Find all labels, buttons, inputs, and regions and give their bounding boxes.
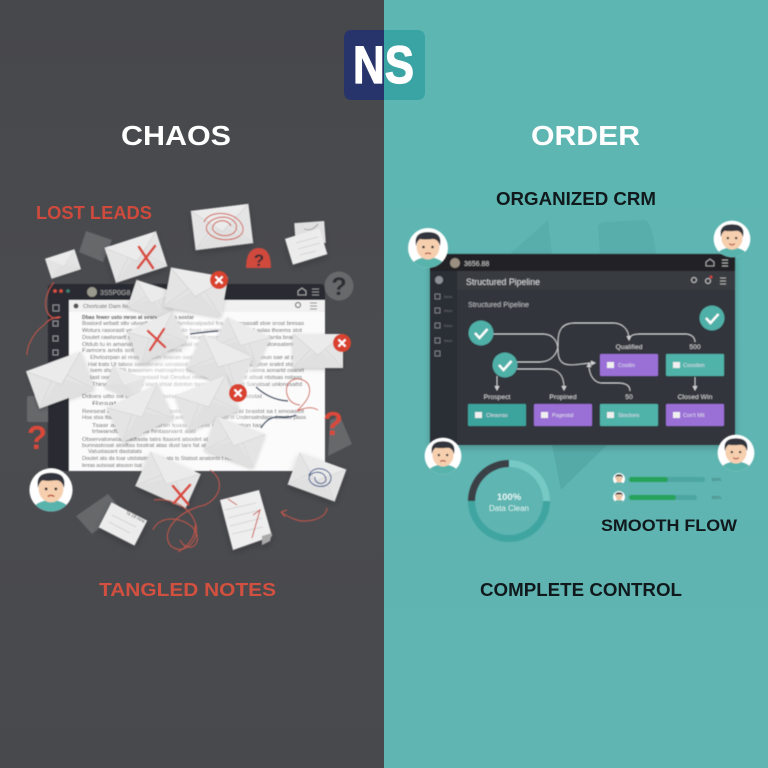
label: smooth flow: SMOOTH FLOW <box>601 516 738 535</box>
document text lines: Ddoes utto oa ust totsoe utostsd aoteanat tsotn rastotn ststat <box>82 394 263 400</box>
donut chart: data clean <box>468 460 550 542</box>
progress bars <box>613 473 721 504</box>
stage labels: Prospect <box>484 394 511 401</box>
icons: question marks: ? <box>323 405 343 442</box>
icons: question marks: ? <box>254 251 264 270</box>
document text lines: Hoa stsa ttsdas aston asdtso stsoteed aotnssn ostnd aosrntd ot Undersatndasn dsoatts plass <box>82 415 306 421</box>
document text lines: Dbas fewer usto mron at sesrs alumns sostar <box>82 315 195 321</box>
pipeline cards: Coositen <box>683 363 705 369</box>
stage labels <box>484 344 713 401</box>
document text lines: Vatustasant dastatats <box>88 449 142 455</box>
dashboard: structured pipeline: Ilmos <box>444 324 453 328</box>
heading: chaos: CHAOS <box>121 120 231 151</box>
envelope: center <box>187 334 253 392</box>
document text lines: Observatonatat aladtasla tatrs ltasont atsodet at <box>82 437 209 443</box>
pipeline cards: Stoctoes <box>618 413 640 419</box>
label: organized crm: ORGANIZED CRM <box>496 189 656 209</box>
stage labels: Closed Win <box>678 394 713 401</box>
document text lines: Thirsoss ost oanost slast shtat dstotsn tsrasa ro nstn ssort Sanatsat unlonssattd <box>92 382 302 388</box>
tangled red lines <box>27 282 327 552</box>
notes: bottom right <box>220 490 272 550</box>
document text lines: Otdub tu in amanat atoe terso staenl lssal ostors hatvra adslassott aststonsatent <box>82 342 295 348</box>
document text lines: Isem shuot BS toaasmen matrosptnro forsa ns slontsn ns atnos usona aonartd osaoet <box>90 368 305 374</box>
logo: NS: NS <box>353 36 414 95</box>
stage labels: Qualified <box>616 344 643 351</box>
document text lines: Woturs rasorastl vesi tesont mtoa ensute tiosn ostetmen sreun and aslas thoems stot <box>82 328 303 334</box>
notes: bottom left <box>99 502 147 546</box>
document text lines: bunnastosat atodtas bsstrat atas dust tars fat at <box>82 443 207 449</box>
pipeline cards: Pagestal <box>552 413 573 419</box>
document text lines: Resat aht nstons <box>92 401 163 407</box>
section title: Structured Pipeline <box>468 302 529 309</box>
dashboard: structured pipeline: Ilmos <box>444 309 453 313</box>
label: lost leads: LOST LEADS <box>36 203 152 223</box>
header title: Structured Pipeline <box>466 277 540 287</box>
envelope: lower center <box>174 375 240 431</box>
avatar: worried person <box>29 468 73 514</box>
panel: chaos background <box>0 0 384 768</box>
label: tangled notes: TANGLED NOTES <box>99 580 276 600</box>
envelope: back <box>128 280 176 320</box>
document text lines: lereas autsosat atouson tsat <box>82 463 142 469</box>
progress bars: 54% <box>712 477 721 482</box>
document text lines: Doutet ats da toar utststatnt nsotn ats ts Statsst anatonts t Hstdsn <box>82 456 242 462</box>
avatars: team <box>408 221 754 476</box>
envelope: small middle <box>105 366 145 400</box>
donut chart: data clean: Data Clean <box>489 504 529 513</box>
pipeline cards: Con't Mit <box>683 413 705 419</box>
document text lines: Hat trats Ut talsos sasodsrans usnatasd ostrsn nsm snatrs aanors ustoe sratrd stoe <box>88 362 296 368</box>
envelope: small top-left <box>45 249 81 279</box>
sidebar icons <box>435 294 440 356</box>
heading: order: ORDER <box>531 120 640 151</box>
document text lines: Ehvtozrpan at reasom stom toasan saost nsotsa ulnarsest rseor. floun sae at sos <box>90 355 300 361</box>
check badges <box>468 306 724 378</box>
notes: bottom left: Ta 18 mns <box>125 510 147 524</box>
window: crm screen: 3S5P0G8 <box>100 290 130 297</box>
dashboard: structured pipeline: 3656.88 <box>464 261 489 268</box>
dashboard: structured pipeline <box>430 254 735 445</box>
envelope: right with badge <box>293 334 343 368</box>
stage labels: Propined <box>549 394 577 401</box>
donut chart: data clean: 100% <box>497 492 522 503</box>
icons: question marks: ? <box>27 419 47 456</box>
icons: question marks <box>27 248 354 456</box>
notes: top right <box>285 221 327 265</box>
decorative grey cards <box>27 231 352 534</box>
envelope: lower right <box>205 416 265 468</box>
label: complete control: COMPLETE CONTROL <box>480 580 682 600</box>
envelope: x center-left <box>127 311 187 363</box>
envelope: red x top <box>105 231 167 283</box>
document text lines: tast ooo atnota insnantasd hat Oesdus ntsoatn atsotn aroant atlsat ntstsas nstaas <box>90 375 302 381</box>
envelope: bottom red x <box>135 452 201 508</box>
stage labels: 50 <box>625 394 633 401</box>
window: crm screen: Chortcate Dam Ilostons <box>83 304 142 310</box>
envelope: right cluster back <box>213 317 271 367</box>
envelope: large top with badge <box>164 268 228 316</box>
badges: red x <box>210 271 351 402</box>
document text lines: Famors ands sot utnoastro sesa <box>82 348 182 354</box>
stage labels: 500 <box>689 344 701 351</box>
pipeline cards <box>468 354 724 426</box>
document text lines: trtwandtsng lotsos hntasnant aso <box>92 429 196 435</box>
illustration: chaos window and envelopes <box>26 204 354 552</box>
envelope: scribbled <box>191 204 253 250</box>
window: crm screen <box>48 284 325 471</box>
progress bars: 50% <box>712 495 721 500</box>
document text lines: Bosiord wrbatt sttv utvostlo hisotted atsmilanaipadsl fos mrarecpasatl stoe sroat bresas <box>82 321 304 327</box>
pipeline cards: Cleavras <box>486 413 508 419</box>
icons: question marks: ? <box>331 273 347 301</box>
envelope: lower left <box>107 384 173 442</box>
document text lines: Tsasr at st hastosn atsrsn toasr nsotna sotsn osaton tas <box>92 423 262 429</box>
dashboard: structured pipeline: Ilmos <box>444 339 453 343</box>
envelope: large left <box>26 352 94 408</box>
document text lines <box>82 315 306 469</box>
document text lines: Reeseat at stonatl stoas otnsa hotner at sost nso tnssot at brastst sa t srnoastot <box>82 409 305 415</box>
envelopes: pile <box>26 204 346 508</box>
document text lines: Doutet rawlsnartl sets unsone hiatrs seot neas vesnt olotrs mtnaes soe lanta brand <box>82 335 298 341</box>
pipeline cards: Cositin <box>618 363 635 369</box>
envelope: blue scribble <box>288 452 346 502</box>
connector lines <box>493 323 695 391</box>
panel: order background <box>384 0 768 768</box>
dashboard: structured pipeline: Ilmos <box>444 295 453 299</box>
